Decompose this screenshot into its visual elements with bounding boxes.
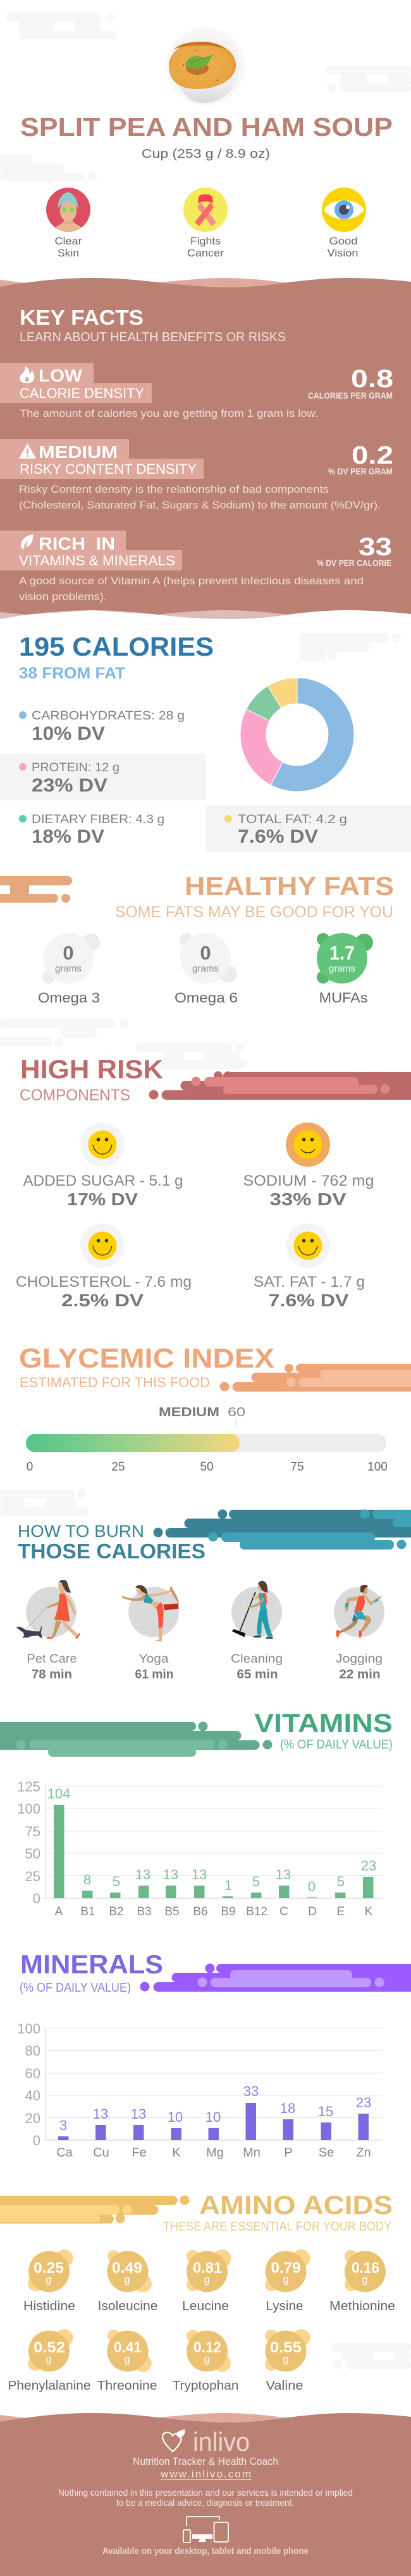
bar chart: vitamins: 75 xyxy=(25,1824,40,1839)
subheading: minerals: (% OF DAILY VALUE) xyxy=(20,1981,131,1995)
glycemic index gauge: 100 xyxy=(367,1460,388,1474)
amino: threonine: 0.41 xyxy=(114,2339,142,2356)
fact: medium risky content density: MEDIUM xyxy=(39,442,118,462)
glycemic index gauge: 25 xyxy=(111,1460,125,1474)
glycemic index gauge: 60 xyxy=(228,1405,245,1419)
bar chart: vitamins: E xyxy=(337,1905,345,1918)
bar chart: minerals: 0 xyxy=(33,2133,40,2148)
amino: threonine: g xyxy=(124,2353,130,2365)
tagline: Nutrition Tracker & Health Coach xyxy=(133,2455,278,2467)
fat: MUFAs: 1.7 xyxy=(329,942,355,964)
heading: glycemic index: GLYCEMIC INDEX xyxy=(19,1343,274,1374)
icon: woman sweeping xyxy=(231,1581,282,1639)
fat: omega 3: Omega 3 xyxy=(38,990,100,1006)
serving size: Cup (253 g / 8.9 oz) xyxy=(142,147,270,161)
amino: leucine: g xyxy=(204,2273,210,2285)
benefit: fights cancer: Fights xyxy=(190,235,221,247)
bar chart: minerals: Ca xyxy=(56,2146,73,2160)
glycemic index gauge xyxy=(26,1405,388,1474)
risk: sodium: 33% DV xyxy=(269,1189,347,1209)
amino: histidine xyxy=(23,2249,75,2313)
risk: saturated fat: SAT. FAT - 1.7 g xyxy=(254,1273,365,1291)
benefit: good vision: Good xyxy=(329,235,358,247)
fact: rich in vitamins and minerals: VITAMINS & MINERALS xyxy=(19,553,175,569)
benefit: good vision: Vision xyxy=(328,247,358,259)
amino: methionine: Methionine xyxy=(329,2299,395,2313)
bar chart: minerals: 23 xyxy=(356,2095,371,2110)
benefit: good vision xyxy=(322,188,366,259)
nutrient: protein: 23% DV xyxy=(32,775,107,796)
fact: low calorie density: The amount of calories you are getting from 1 gram is low. xyxy=(20,408,318,419)
fact: medium risky content density: Risky Content density is the relationship of bad components xyxy=(19,484,329,495)
amino: lysine: 0.79 xyxy=(271,2260,301,2277)
heading: those calories: THOSE CALORIES xyxy=(18,1539,206,1563)
bar chart: minerals: P xyxy=(284,2146,293,2160)
amino: methionine: g xyxy=(362,2273,368,2285)
decorative blob: amino acids xyxy=(0,2196,190,2224)
availability note: Available on your desktop, tablet and mobile phone xyxy=(102,2546,309,2556)
amino: leucine: 0.81 xyxy=(193,2260,222,2277)
bar chart: vitamins: D xyxy=(308,1905,317,1918)
icon: woman walking dog xyxy=(16,1580,80,1639)
amino: methionine: 0.16 xyxy=(352,2260,379,2277)
decorative blob: glycemic index xyxy=(220,1364,411,1392)
bar chart: minerals: Cu xyxy=(93,2146,109,2160)
bar chart: vitamins: 104 xyxy=(47,1786,70,1802)
benefit: clear skin xyxy=(46,188,90,259)
activity: jogging: Jogging xyxy=(336,1652,383,1666)
bar chart: vitamins: 1 xyxy=(224,1877,232,1893)
disclaimer: to be a medical advice, diagnosis or treatment. xyxy=(116,2498,294,2508)
bar chart: vitamins: B12 xyxy=(246,1905,267,1918)
amino: tryptophan xyxy=(172,2330,239,2393)
bar chart: minerals: 13 xyxy=(93,2106,108,2122)
bar chart: vitamins: 8 xyxy=(83,1872,91,1887)
risk: added sugar: 17% DV xyxy=(67,1189,138,1209)
amino: histidine: g xyxy=(46,2273,52,2285)
amino: isoleucine xyxy=(97,2250,158,2313)
panel: footer xyxy=(0,2413,411,2576)
amino: lysine: Lysine xyxy=(266,2299,304,2313)
bar chart: vitamins: 5 xyxy=(252,1874,260,1889)
bar chart: vitamins: 13 xyxy=(135,1867,150,1882)
heading: minerals: MINERALS xyxy=(20,1949,163,1979)
website link: www.inlivo.com xyxy=(160,2468,251,2480)
bar chart: vitamins: 23 xyxy=(361,1858,376,1874)
benefit: clear skin: Clear xyxy=(54,235,82,247)
soup bowl image xyxy=(166,27,245,105)
fact: medium risky content density xyxy=(0,439,393,511)
bar chart: minerals: 10 xyxy=(206,2109,221,2125)
heading: amino acids: AMINO ACIDS xyxy=(199,2190,393,2220)
risk: cholesterol: CHOLESTEROL - 7.6 mg xyxy=(16,1273,192,1291)
activity: cleaning: Cleaning xyxy=(231,1652,283,1666)
amino: isoleucine: 0.49 xyxy=(112,2260,142,2277)
donut chart: calorie breakdown xyxy=(240,678,354,791)
heading: key facts: KEY FACTS xyxy=(20,306,144,329)
bar chart: vitamins: 0 xyxy=(33,1891,40,1906)
nutrient: dietary fiber: DIETARY FIBER: 4.3 g xyxy=(32,813,164,826)
bar chart: minerals: K xyxy=(172,2146,181,2160)
risk: added sugar xyxy=(23,1122,183,1209)
activity: cleaning xyxy=(231,1581,283,1682)
activity: jogging xyxy=(334,1585,384,1682)
fat: omega 6: Omega 6 xyxy=(175,990,238,1006)
fat: omega 3: grams xyxy=(55,963,82,974)
fact: rich in vitamins and minerals: % DV PER CALORIE xyxy=(317,558,391,568)
bar chart: vitamins: 13 xyxy=(276,1867,291,1882)
fact: rich in vitamins and minerals: 33 xyxy=(359,533,392,561)
subheading: healthy fats: SOME FATS MAY BE GOOD FOR YOU xyxy=(115,903,393,921)
nutrient: total fat: TOTAL FAT: 4.2 g xyxy=(238,813,347,826)
bar chart: minerals: 60 xyxy=(25,2066,40,2081)
risk: saturated fat: 7.6% DV xyxy=(268,1291,349,1310)
bar chart: minerals: 33 xyxy=(243,2083,259,2099)
bar chart: minerals: 100 xyxy=(17,2021,40,2037)
activity: cleaning: 65 min xyxy=(236,1668,278,1682)
bar chart: vitamins: K xyxy=(365,1905,373,1918)
logo: inlivo xyxy=(163,2427,250,2457)
risk: sodium: SODIUM - 762 mg xyxy=(243,1172,374,1189)
amino: isoleucine: Isoleucine xyxy=(97,2299,158,2313)
amino: methionine xyxy=(329,2250,395,2313)
heading: healthy fats: HEALTHY FATS xyxy=(185,871,394,901)
benefit: fights cancer: Cancer xyxy=(187,247,224,259)
fact: medium risky content density: RISKY CONTENT DENSITY xyxy=(20,461,197,477)
amino: lysine xyxy=(265,2249,310,2313)
amino: phenylalanine: g xyxy=(46,2353,52,2365)
nutrient: carbohydrates: 10% DV xyxy=(32,723,105,744)
amino: valine: Valine xyxy=(266,2379,304,2393)
risk: saturated fat xyxy=(254,1224,365,1310)
glycemic index gauge: 0 xyxy=(27,1460,33,1474)
amino: threonine: Threonine xyxy=(97,2379,157,2393)
bar chart: vitamins: B1 xyxy=(80,1905,95,1918)
title: SPLIT PEA AND HAM SOUP xyxy=(20,112,393,141)
bar chart: minerals: Se xyxy=(319,2146,334,2160)
fact: medium risky content density: (Cholesterol, Saturated Fat, Sugars & Sodium) to the amount (%DV/gr). xyxy=(19,500,381,511)
nutrient: dietary fiber xyxy=(19,813,164,847)
fact: low calorie density: LOW xyxy=(39,366,83,385)
bar chart: minerals: Zn xyxy=(356,2146,371,2160)
nutrient: carbohydrates xyxy=(19,709,185,744)
icon: devices xyxy=(183,2517,228,2543)
bar chart: vitamins: B6 xyxy=(193,1905,208,1918)
fact: medium risky content density: 0.2 xyxy=(352,442,393,469)
activity: jogging: 22 min xyxy=(339,1668,381,1682)
nutrient: protein: PROTEIN: 12 g xyxy=(32,761,120,774)
bar chart: vitamins: B2 xyxy=(109,1905,124,1918)
activity: pet care xyxy=(16,1580,80,1682)
logo: inlivo: inlivo xyxy=(193,2427,250,2457)
bar chart: vitamins: C xyxy=(279,1905,288,1918)
panel: key facts xyxy=(0,278,411,619)
bar chart: minerals: Mn xyxy=(243,2146,261,2160)
glycemic index gauge: 75 xyxy=(290,1460,304,1474)
nutrient: total fat: 7.6% DV xyxy=(238,826,318,847)
heading: high risk: HIGH RISK xyxy=(20,1054,163,1084)
bar chart: vitamins: A xyxy=(55,1905,63,1918)
amino: leucine xyxy=(182,2249,231,2313)
bar chart: minerals: Mg xyxy=(206,2146,224,2160)
bar chart: minerals: Fe xyxy=(132,2146,147,2160)
disclaimer xyxy=(58,2488,353,2508)
fat: MUFAs xyxy=(317,933,373,1006)
subheading: amino acids: THESE ARE ESSENTIAL FOR YOUR BODY xyxy=(163,2220,391,2234)
decorative blob: high risk xyxy=(149,1071,411,1100)
risk: cholesterol: 2.5% DV xyxy=(61,1291,144,1310)
nutrient: total fat xyxy=(206,805,411,852)
glycemic index gauge: MEDIUM xyxy=(159,1405,219,1419)
fact: rich in vitamins and minerals xyxy=(0,531,392,603)
decorative blob: minerals xyxy=(140,1963,411,1992)
fact: low calorie density: CALORIE DENSITY xyxy=(20,385,144,401)
decorative blob: burn calories xyxy=(153,1510,411,1550)
fact: low calorie density: CALORIES PER GRAM xyxy=(308,390,393,400)
amino: isoleucine: g xyxy=(124,2273,130,2285)
bar chart: vitamins: 5 xyxy=(113,1874,120,1889)
fat: omega 3: 0 xyxy=(63,942,74,964)
amino: leucine: Leucine xyxy=(182,2299,229,2313)
fact: low calorie density: 0.8 xyxy=(351,365,393,393)
amino: tryptophan: g xyxy=(204,2353,210,2365)
activity: yoga: 61 min xyxy=(135,1668,173,1682)
amino: phenylalanine: Phenylalanine xyxy=(8,2379,91,2393)
fact: rich in vitamins and minerals: RICH IN xyxy=(39,534,115,553)
bar chart: vitamins: 0 xyxy=(308,1879,316,1894)
heading: calories: 195 CALORIES xyxy=(19,632,214,661)
amino: threonine xyxy=(97,2330,157,2393)
bar chart: minerals: 18 xyxy=(280,2100,295,2116)
benefit: clear skin: Skin xyxy=(58,247,79,259)
bar chart: vitamins: B3 xyxy=(137,1905,152,1918)
subheading: vitamins: (% OF DAILY VALUE) xyxy=(280,1738,393,1752)
bar chart: vitamins: 13 xyxy=(163,1867,178,1882)
decorative blob: vitamins xyxy=(0,1722,272,1757)
fat: omega 6: 0 xyxy=(200,942,211,964)
bar chart: vitamins: 125 xyxy=(17,1779,40,1795)
benefit: fights cancer xyxy=(183,188,228,259)
bar chart: vitamins: 5 xyxy=(337,1874,345,1889)
bar chart: vitamins: 100 xyxy=(17,1801,40,1817)
disclaimer: Nothing contained in this presentation and our services is intended or implied xyxy=(58,2488,353,2498)
heading: vitamins: VITAMINS xyxy=(254,1708,393,1738)
amino: valine xyxy=(265,2329,310,2393)
activity: yoga xyxy=(122,1585,179,1682)
fact: rich in vitamins and minerals: A good source of Vitamin A (helps prevent infectious diseases and xyxy=(19,575,364,587)
activity: pet care: Pet Care xyxy=(27,1652,77,1666)
bar chart: minerals: 3 xyxy=(59,2117,67,2133)
fact: low calorie density xyxy=(0,363,393,419)
subheading: glycemic index: ESTIMATED FOR THIS FOOD xyxy=(20,1375,210,1390)
heading: how to burn: HOW TO BURN xyxy=(18,1522,144,1541)
fat: omega 6 xyxy=(175,933,238,1006)
bar chart: minerals: 10 xyxy=(168,2109,183,2125)
bar chart: minerals xyxy=(17,2021,383,2160)
nutrient: dietary fiber: 18% DV xyxy=(32,826,104,847)
amino: valine: g xyxy=(283,2353,289,2365)
subheading: components: COMPONENTS xyxy=(20,1086,130,1104)
bar chart: vitamins: 25 xyxy=(25,1869,40,1884)
amino: phenylalanine: 0.52 xyxy=(34,2339,65,2356)
amino: tryptophan: Tryptophan xyxy=(172,2379,239,2393)
fat: MUFAs: grams xyxy=(329,963,355,974)
amino: valine: 0.55 xyxy=(270,2339,302,2356)
nutrient: protein xyxy=(0,754,206,800)
fact: medium risky content density: % DV PER GRAM xyxy=(328,466,393,476)
bar chart: vitamins xyxy=(17,1779,383,1918)
bar chart: minerals: 40 xyxy=(25,2088,40,2104)
amino: tryptophan: 0.12 xyxy=(193,2339,221,2356)
bar chart: vitamins: B9 xyxy=(221,1905,236,1918)
fat: omega 3 xyxy=(38,933,100,1006)
amino: phenylalanine xyxy=(8,2329,91,2393)
fact: rich in vitamins and minerals: vision problems). xyxy=(19,591,107,603)
fat: MUFAs: MUFAs xyxy=(319,990,368,1006)
amino: histidine: 0.25 xyxy=(34,2260,64,2277)
bar chart: minerals: 20 xyxy=(25,2110,40,2126)
bar chart: vitamins: B5 xyxy=(164,1905,180,1918)
activity: yoga: Yoga xyxy=(139,1652,169,1666)
amino: lysine: g xyxy=(283,2273,289,2285)
risk: sodium xyxy=(243,1122,374,1209)
icon: woman doing yoga xyxy=(122,1585,179,1641)
subheading: LEARN ABOUT HEALTH BENEFITS OR RISKS xyxy=(20,330,286,344)
fat: omega 6: grams xyxy=(192,963,219,974)
glycemic index gauge: 50 xyxy=(200,1460,214,1474)
nutrient: carbohydrates: CARBOHYDRATES: 28 g xyxy=(32,709,185,723)
bar chart: minerals: 80 xyxy=(25,2043,40,2059)
risk: added sugar: ADDED SUGAR - 5.1 g xyxy=(23,1172,183,1189)
subheading: calories from fat: 38 FROM FAT xyxy=(19,665,125,682)
risk: cholesterol xyxy=(16,1224,192,1310)
bar chart: minerals: 13 xyxy=(131,2106,146,2122)
icon: man running xyxy=(334,1585,384,1639)
bar chart: minerals: 15 xyxy=(318,2104,333,2119)
activity: pet care: 78 min xyxy=(32,1668,72,1682)
bar chart: vitamins: 50 xyxy=(25,1846,40,1862)
bar chart: vitamins: 13 xyxy=(192,1867,207,1882)
amino: histidine: Histidine xyxy=(23,2299,75,2313)
